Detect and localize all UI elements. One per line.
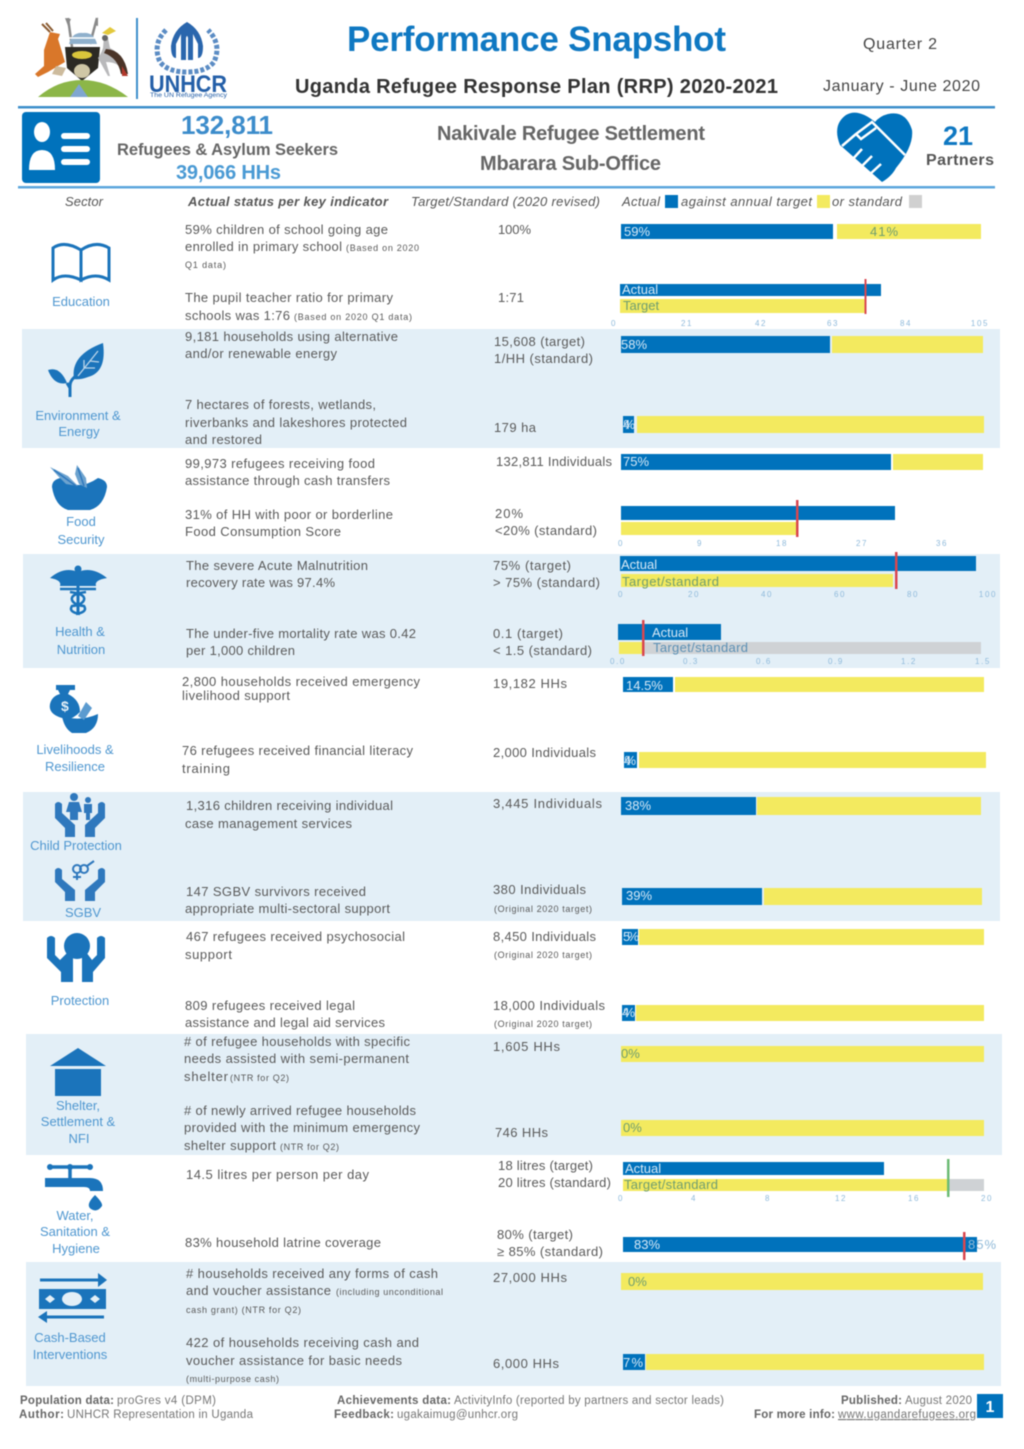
panel: protection: 809 refugees received legal — [185, 998, 355, 1013]
panel: health and nutrition: 80 — [907, 590, 919, 599]
footer: ActivityInfo (reported by partners and sector leads) — [454, 1395, 724, 1407]
panel: shelter, settlement and NFI: shelter — [184, 1069, 229, 1084]
panel: cash-based interventions: voucher assistance for basic needs — [186, 1353, 402, 1368]
panel: protection: 467 refugees received psychosocial — [186, 929, 405, 944]
panel: environment and energy: 15,608 (target) — [494, 334, 585, 349]
panel: livelihoods and resilience: $ — [61, 698, 69, 714]
panel: health and nutrition: Actual — [621, 557, 657, 572]
panel: health and nutrition: 40 — [761, 590, 773, 599]
panel: water, sanitation and hygiene: Target/standard — [624, 1177, 718, 1192]
panel: education: 1:71 — [498, 290, 524, 305]
panel: protection — [47, 929, 984, 1030]
footer: Author: — [19, 1409, 64, 1421]
footer: UNHCR Representation in Uganda — [67, 1409, 254, 1421]
panel: cash-based interventions: and voucher assistance — [186, 1283, 331, 1298]
panel: protection: Protection — [51, 993, 109, 1008]
panel: health and nutrition: 0 — [618, 590, 624, 599]
panel: water, sanitation and hygiene: 12 — [835, 1194, 847, 1203]
panel: shelter, settlement and NFI: needs assisted with semi-permanent — [184, 1051, 409, 1066]
panel: water, sanitation and hygiene: Actual — [625, 1161, 661, 1176]
panel: water, sanitation and hygiene: 4 — [691, 1194, 697, 1203]
footer: Published: — [841, 1395, 902, 1407]
page number — [977, 1394, 1003, 1418]
panel: health and nutrition: Target/standard — [622, 574, 719, 589]
partners count — [926, 121, 994, 169]
panel: education: 0 — [611, 319, 617, 328]
panel: environment and energy: 179 ha — [494, 420, 537, 435]
panel: livelihoods and resilience: 2,000 Individuals — [493, 745, 596, 760]
panel: education: Target — [623, 298, 660, 313]
panel: education — [52, 222, 989, 328]
panel: food security: Security — [58, 532, 105, 547]
panel: cash-based interventions: # households received any forms of cash — [186, 1266, 438, 1281]
panel: food security: 99,973 refugees receiving food — [185, 456, 375, 471]
panel: environment and energy: 4% — [623, 417, 635, 432]
panel: shelter, settlement and NFI: provided with the minimum emergency — [184, 1120, 420, 1135]
panel: water, sanitation and hygiene: 20 — [981, 1194, 993, 1203]
table header and legend — [65, 194, 922, 209]
panel: water, sanitation and hygiene: 83% household latrine coverage — [185, 1235, 381, 1250]
panel: health and nutrition: 0.3 — [683, 657, 699, 666]
panel: education: 59% — [624, 224, 650, 239]
footer — [19, 1395, 976, 1421]
panel: environment and energy — [35, 329, 984, 447]
panel: livelihoods and resilience: 14.5% — [626, 678, 663, 693]
population figures: 132,811 — [181, 110, 273, 140]
panel: livelihoods and resilience: training — [182, 761, 230, 776]
table header and legend: Target/Standard (2020 revised) — [411, 194, 600, 209]
panel: education: 42 — [755, 319, 767, 328]
panel: cash-based interventions: Interventions — [33, 1347, 108, 1362]
table header and legend: or standard — [832, 194, 903, 209]
panel: livelihoods and resilience: 19,182 HHs — [493, 676, 568, 691]
panel: shelter, settlement and NFI: 746 HHs — [495, 1125, 548, 1140]
icon: person card — [22, 112, 100, 183]
settlement name: Mbarara Sub-Office — [480, 153, 661, 175]
panel: cash-based interventions: (including unconditional — [336, 1287, 443, 1297]
panel: sector background bands — [22, 329, 1002, 1386]
panel: food security: 9 — [697, 539, 703, 548]
panel: environment and energy: 9,181 households using alternative — [185, 329, 398, 344]
logo: UNHCR: The UN Refugee Agency — [150, 93, 227, 99]
panel: food security — [50, 454, 983, 548]
panel: education: 41% — [870, 224, 898, 239]
panel: food security: Food Consumption Score — [185, 524, 341, 539]
panel: livelihoods and resilience: 76 refugees received financial literacy — [182, 743, 414, 758]
panel: water, sanitation and hygiene: 14.5 litres per person per day — [186, 1167, 370, 1182]
panel: environment and energy: 7 hectares of forests, wetlands, — [185, 397, 376, 412]
panel: SGBV: (Original 2020 target) — [494, 904, 592, 914]
panel: water, sanitation and hygiene: Water, — [56, 1208, 94, 1223]
panel: cash-based interventions: 7% — [623, 1355, 643, 1370]
panel: environment and energy: riverbanks and lakeshores protected — [185, 415, 407, 430]
panel: water, sanitation and hygiene: 85% — [968, 1237, 996, 1252]
logo: UNHCR — [149, 22, 227, 99]
panel: child protection: 3,445 Individuals — [493, 796, 602, 811]
panel: water, sanitation and hygiene: 16 — [908, 1194, 920, 1203]
subtitle: Uganda Refugee Response Plan (RRP) 2020-2021 — [295, 76, 778, 98]
panel: health and nutrition: per 1,000 children — [186, 643, 295, 658]
panel: cash-based interventions: Cash-Based — [34, 1330, 106, 1345]
footer: Feedback: — [334, 1409, 394, 1421]
panel: health and nutrition: 75% (target) — [493, 558, 571, 573]
footer: proGres v4 (DPM) — [117, 1395, 216, 1407]
panel: health and nutrition: 60 — [834, 590, 846, 599]
panel: protection: 4% — [622, 1005, 635, 1020]
panel: health and nutrition: 0.6 — [756, 657, 772, 666]
panel: cash-based interventions: (multi-purpose cash) — [186, 1374, 279, 1384]
page number: 1 — [986, 1399, 995, 1416]
footer: Population data: — [20, 1395, 114, 1407]
panel: food security: 27 — [856, 539, 868, 548]
panel: SGBV: 39% — [626, 888, 652, 903]
header rule — [18, 106, 995, 108]
panel: environment and energy: Energy — [58, 424, 100, 439]
panel: education: 63 — [827, 319, 839, 328]
panel: protection: (Original 2020 target) — [494, 1019, 592, 1029]
panel: cash-based interventions: 0% — [628, 1274, 647, 1289]
panel: environment and energy: 58% — [621, 337, 647, 352]
panel: education: enrolled in primary school — [185, 239, 342, 254]
panel: water, sanitation and hygiene: 80% (target) — [497, 1227, 573, 1242]
panel: livelihoods and resilience — [36, 674, 986, 776]
panel: health and nutrition: Nutrition — [57, 642, 105, 657]
table header and legend: Actual status per key indicator — [187, 194, 389, 209]
panel: health and nutrition: < 1.5 (standard) — [493, 643, 592, 658]
panel: education: 105 — [971, 319, 989, 328]
panel: health and nutrition: The under-five mortality rate was 0.42 — [186, 626, 416, 641]
panel: education: The pupil teacher ratio for primary — [185, 290, 394, 305]
panel: food security: 0 — [618, 539, 624, 548]
panel: environment and energy: and/or renewable energy — [185, 346, 338, 361]
panel: water, sanitation and hygiene: Sanitation & — [40, 1224, 110, 1239]
panel: child protection: case management services — [185, 816, 352, 831]
panel: water, sanitation and hygiene: 83% — [634, 1237, 660, 1252]
panel: cash-based interventions: 27,000 HHs — [493, 1270, 568, 1285]
panel: education: 84 — [900, 319, 912, 328]
panel: protection: (Original 2020 target) — [494, 950, 592, 960]
panel: health and nutrition: 1.5 — [975, 657, 991, 666]
panel: health and nutrition: Target/standard — [653, 640, 748, 655]
panel: child protection: 38% — [625, 798, 651, 813]
panel: protection: support — [185, 947, 232, 962]
panel: water, sanitation and hygiene — [40, 1158, 996, 1260]
panel: environment and energy: and restored — [185, 432, 262, 447]
panel: cash-based interventions: cash grant) (NTR for Q2) — [186, 1305, 301, 1315]
panel: shelter, settlement and NFI: (NTR for Q2) — [230, 1073, 289, 1083]
panel: food security: 18 — [776, 539, 788, 548]
panel: shelter, settlement and NFI: 0% — [621, 1046, 640, 1061]
panel: livelihoods and resilience: Resilience — [45, 759, 105, 774]
panel: shelter, settlement and NFI: # of newly arrived refugee households — [184, 1103, 416, 1118]
panel: education: 21 — [681, 319, 693, 328]
panel: food security: 20% — [495, 506, 523, 521]
footer: August 2020 — [905, 1395, 972, 1407]
panel: food security: <20% (standard) — [495, 523, 597, 538]
panel: environment and energy: 1/HH (standard) — [494, 351, 593, 366]
logo divider — [136, 18, 138, 99]
panel: water, sanitation and hygiene: 20 litres (standard) — [498, 1175, 611, 1190]
panel: environment and energy: Environment & — [35, 408, 121, 423]
panel: food security: assistance through cash transfers — [185, 473, 390, 488]
panel: shelter, settlement and NFI: Shelter, — [56, 1098, 100, 1113]
panel: SGBV: appropriate multi-sectoral support — [185, 901, 390, 916]
population figures — [117, 110, 338, 184]
panel: health and nutrition: The severe Acute Malnutrition — [186, 558, 368, 573]
panel: shelter, settlement and NFI: 0% — [623, 1120, 642, 1135]
section rule — [18, 186, 995, 188]
panel: SGBV: 147 SGBV survivors received — [186, 884, 366, 899]
partners count: 21 — [943, 121, 973, 151]
panel: shelter, settlement and NFI: NFI — [69, 1131, 89, 1146]
panel: education: Q1 data) — [185, 260, 226, 270]
panel: food security: 36 — [936, 539, 948, 548]
panel: SGBV: SGBV — [65, 905, 101, 920]
panel: child protection: 1,316 children receiving individual — [186, 798, 393, 813]
icon: handshake — [837, 113, 912, 182]
panel: shelter, settlement and NFI: (NTR for Q2) — [280, 1142, 339, 1152]
footer: ugakaimug@unhcr.org — [397, 1409, 518, 1421]
panel: protection: 5% — [623, 929, 639, 944]
panel: food security: 132,811 Individuals — [496, 454, 612, 469]
period label: January - June 2020 — [823, 78, 980, 95]
panel: livelihoods and resilience: 2,800 households received emergency — [182, 674, 420, 689]
panel: shelter, settlement and NFI: shelter support — [184, 1138, 276, 1153]
panel: education: 59% children of school going age — [185, 222, 388, 237]
footer: For more info: — [754, 1409, 835, 1421]
panel: health and nutrition: Health & — [55, 624, 105, 639]
panel: education: 100% — [498, 222, 531, 237]
panel: shelter, settlement and NFI: # of refugee households with specific — [184, 1034, 410, 1049]
settlement name: Nakivale Refugee Settlement — [437, 123, 705, 145]
panel: health and nutrition — [50, 552, 997, 666]
panel: cash-based interventions: 422 of households receiving cash and — [186, 1335, 419, 1350]
table header and legend: Actual — [621, 194, 661, 209]
quarter label: Quarter 2 — [863, 36, 937, 53]
logo: UNHCR: UNHCR — [149, 71, 227, 98]
panel: shelter, settlement and NFI: Settlement & — [41, 1114, 116, 1129]
panel: education: Actual — [622, 282, 658, 297]
panel: health and nutrition: 20 — [688, 590, 700, 599]
panel: child protection: Child Protection — [30, 838, 122, 853]
panel: water, sanitation and hygiene: ≥ 85% (standard) — [497, 1244, 603, 1259]
panel: health and nutrition: Actual — [652, 625, 688, 640]
panel: health and nutrition: recovery rate was 97.4% — [186, 575, 335, 590]
panel: cash-based interventions: 6,000 HHs — [493, 1356, 560, 1371]
panel: SGBV: 380 Individuals — [493, 882, 586, 897]
panel: water, sanitation and hygiene: 18 litres (target) — [498, 1158, 593, 1173]
footer: www.ugandarefugees.org — [837, 1409, 976, 1421]
panel: shelter, settlement and NFI — [41, 1034, 984, 1153]
panel: education: (Based on 2020 — [346, 243, 419, 253]
panel: livelihoods and resilience: 4% — [624, 753, 636, 768]
panel: food security: 75% — [623, 454, 649, 469]
title: Performance Snapshot — [347, 20, 726, 59]
panel: child protection — [30, 793, 981, 853]
panel: shelter, settlement and NFI: 1,605 HHs — [493, 1039, 560, 1054]
population figures: 39,066 HHs — [176, 162, 281, 184]
panel: livelihoods and resilience: Livelihoods & — [36, 742, 114, 757]
population figures: Refugees & Asylum Seekers — [117, 141, 338, 159]
panel: protection: 18,000 Individuals — [493, 998, 606, 1013]
panel: education: Education — [52, 294, 110, 309]
panel: education: schools was 1:76 — [185, 308, 290, 323]
panel: livelihoods and resilience: livelihood support — [182, 688, 290, 703]
logo: Uganda coat of arms — [35, 17, 128, 97]
table header and legend: against annual target — [681, 194, 813, 209]
panel: food security: Food — [66, 514, 96, 529]
panel: health and nutrition: 100 — [979, 590, 997, 599]
panel: health and nutrition: 0.1 (target) — [493, 626, 563, 641]
panel: food security: 31% of HH with poor or borderline — [185, 507, 393, 522]
partners count: Partners — [926, 152, 994, 169]
panel: health and nutrition: 0.0 — [610, 657, 626, 666]
panel: protection: 8,450 Individuals — [493, 929, 596, 944]
footer: Achievements data: — [337, 1395, 451, 1407]
panel: water, sanitation and hygiene: 0 — [618, 1194, 624, 1203]
table header and legend: Sector — [65, 194, 104, 209]
settlement name — [437, 123, 705, 175]
panel: water, sanitation and hygiene: Hygiene — [52, 1241, 100, 1256]
panel: health and nutrition: 0.9 — [828, 657, 844, 666]
panel: cash-based interventions — [33, 1266, 984, 1384]
panel: education: (Based on 2020 Q1 data) — [294, 312, 412, 322]
panel: health and nutrition: > 75% (standard) — [493, 575, 600, 590]
panel: SGBV — [55, 861, 982, 920]
panel: health and nutrition: 1.2 — [901, 657, 917, 666]
panel: protection: assistance and legal aid services — [185, 1015, 386, 1030]
panel: water, sanitation and hygiene: 8 — [765, 1194, 771, 1203]
